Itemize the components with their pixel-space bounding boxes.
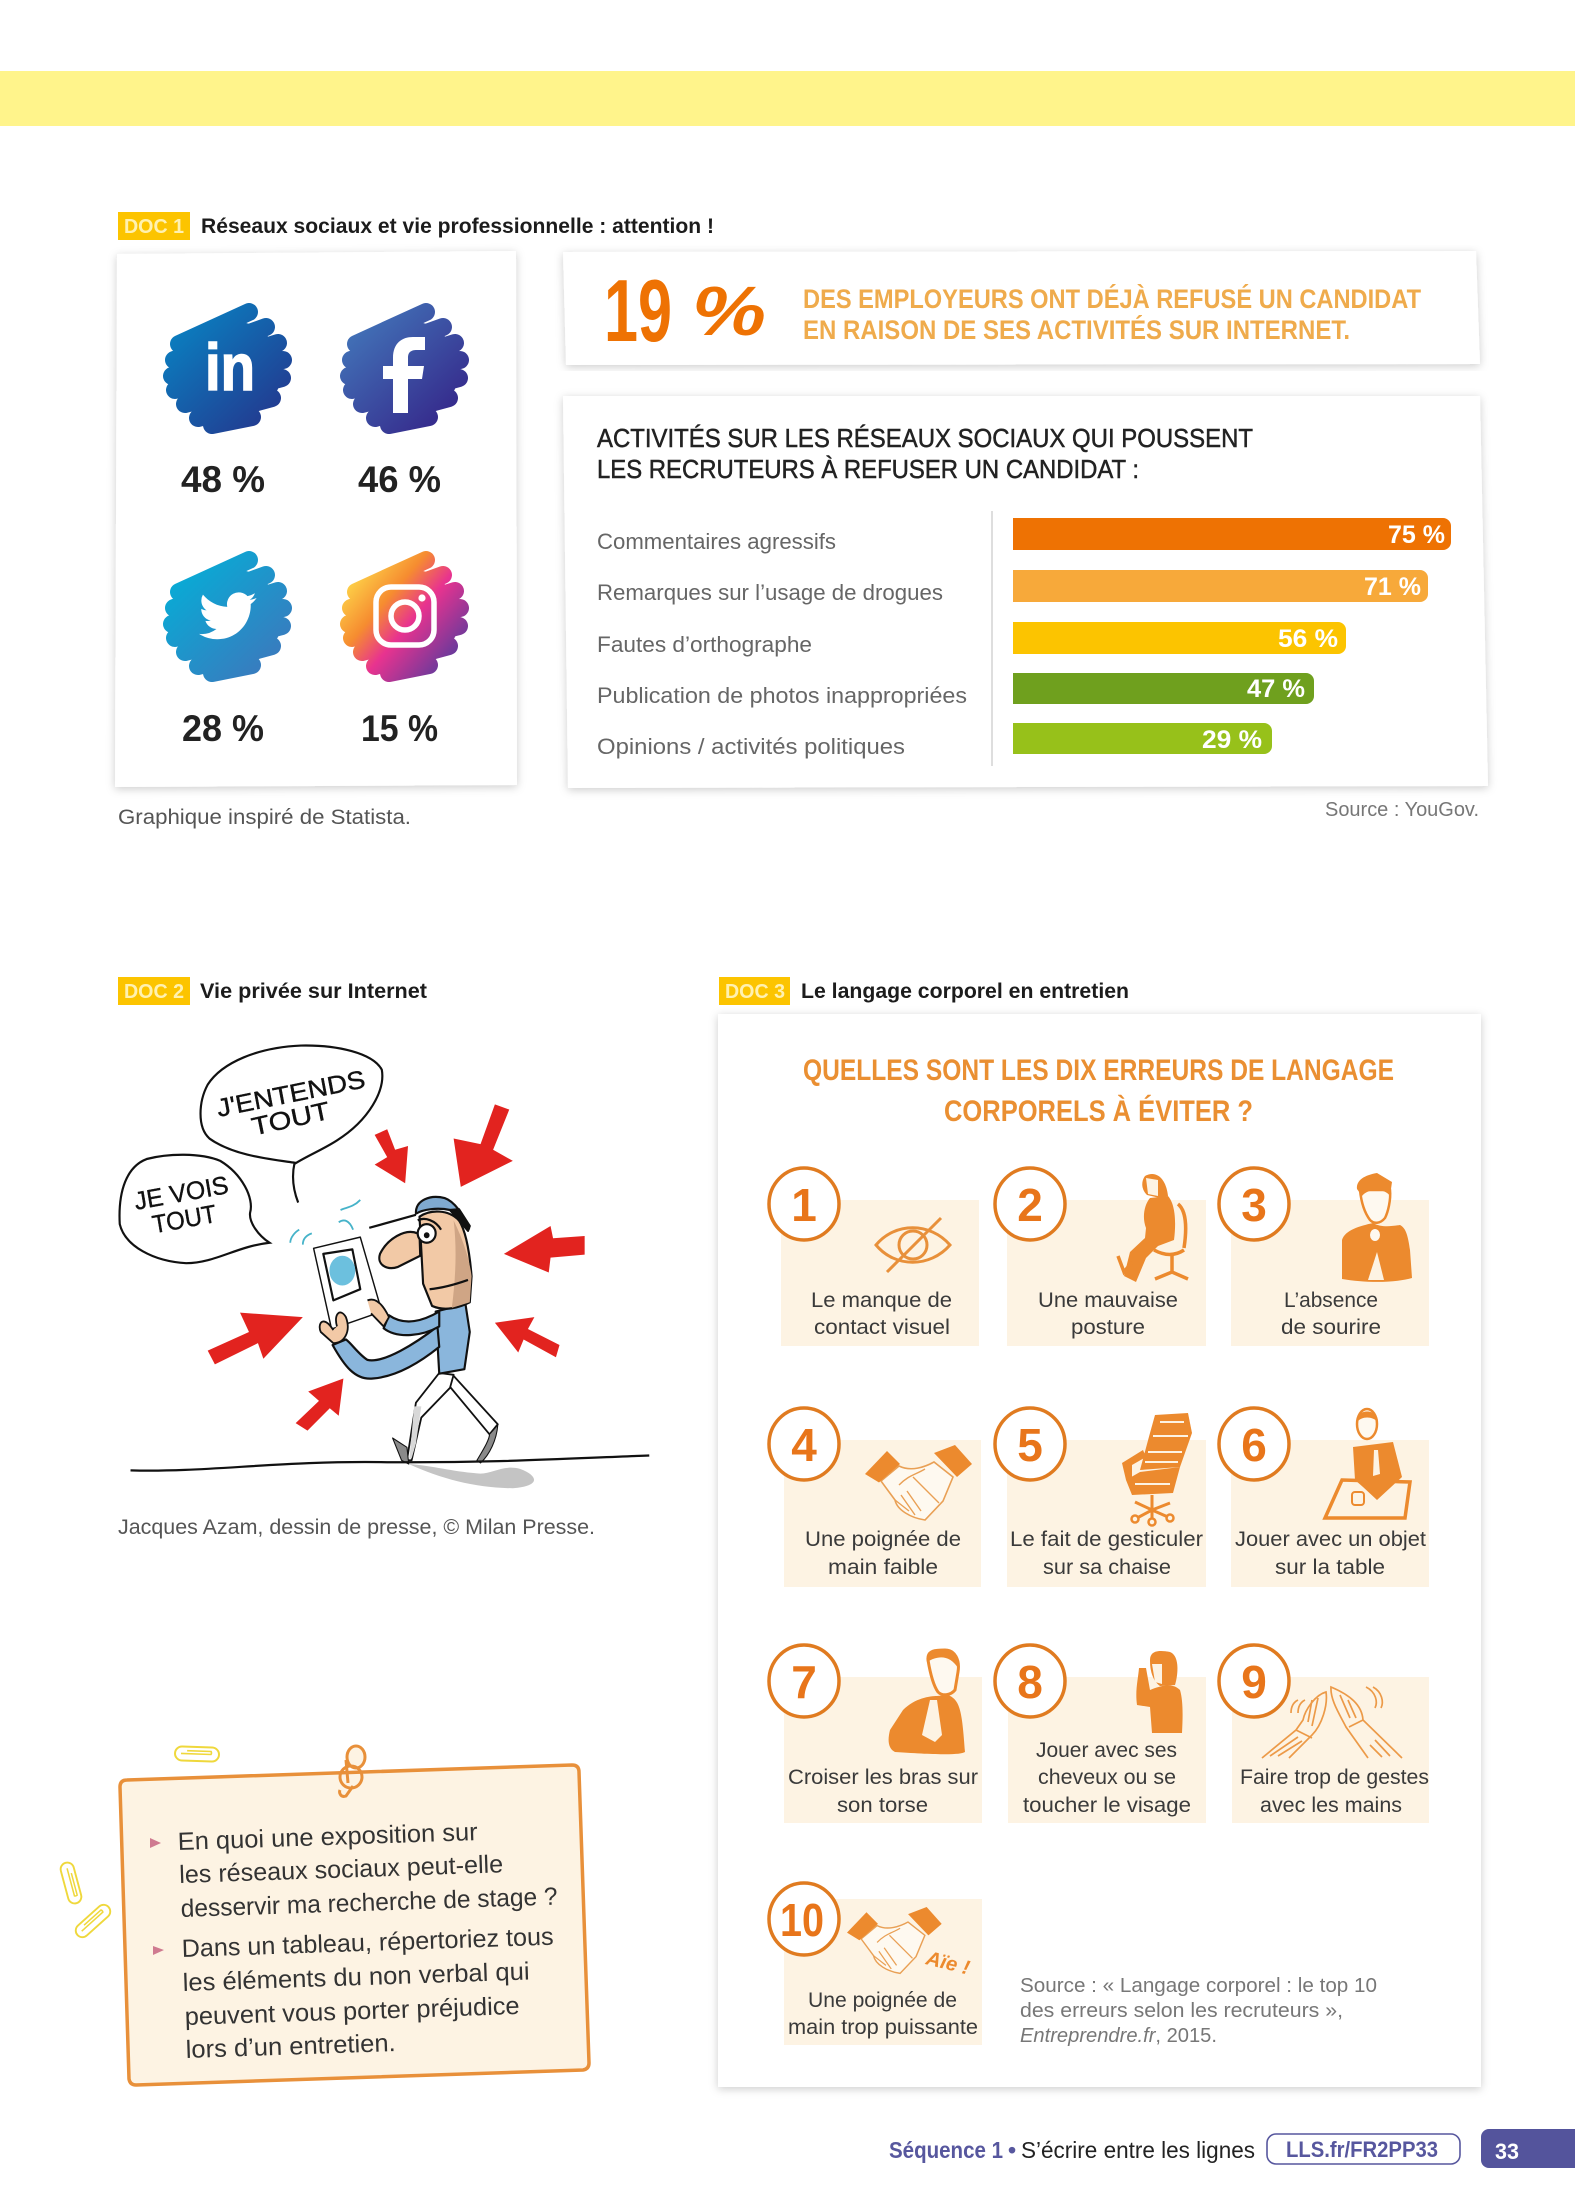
item 8: 8 — [1017, 1656, 1043, 1708]
icon: strong handshake — [847, 1907, 942, 1973]
item 9: avec les mains — [1260, 1793, 1402, 1817]
item 4 — [769, 1408, 981, 1587]
callout text: DES EMPLOYEURS ONT DÉJÀ REFUSÉ UN CANDIDAT — [803, 283, 1421, 314]
item 2: posture — [1071, 1315, 1145, 1339]
speech bubble: je vois tout: TOUT — [150, 1201, 219, 1239]
icon: office chair — [1122, 1413, 1192, 1526]
questions text: desservir ma recherche de stage ? — [180, 1883, 558, 1923]
item 3 — [1219, 1168, 1429, 1346]
item 8 — [995, 1645, 1206, 1823]
item 7: Croiser les bras sur — [788, 1765, 978, 1789]
doc 1 heading: Réseaux sociaux et vie professionnelle : attention ! — [201, 215, 714, 238]
questions text: Dans un tableau, répertoriez tous — [181, 1923, 554, 1963]
source: entreprendre: des erreurs selon les recruteurs », — [1020, 2000, 1343, 2022]
item 6 — [1219, 1408, 1429, 1587]
questions text: les réseaux sociaux peut-elle — [179, 1850, 504, 1889]
chart heading: LES RECRUTEURS À REFUSER UN CANDIDAT : — [597, 454, 1139, 484]
bar labels: Commentaires agressifs — [597, 529, 836, 554]
icon: person at table — [1325, 1409, 1410, 1518]
item 7 — [769, 1645, 982, 1823]
speech bubble: j'entends tout: TOUT — [249, 1098, 332, 1142]
questions text: lors d’un entretien. — [185, 2029, 396, 2064]
panel: social networks — [115, 251, 517, 787]
callout text: EN RAISON DE SES ACTIVITÉS SUR INTERNET. — [803, 314, 1350, 345]
item 2 — [995, 1168, 1206, 1346]
question card — [59, 1746, 589, 2085]
item 9 — [1219, 1645, 1429, 1823]
item 5 — [995, 1408, 1206, 1587]
item 9: 9 — [1241, 1656, 1267, 1708]
panel: bar chart — [563, 396, 1488, 788]
source: yougov: Source : YouGov. — [1325, 799, 1479, 821]
caption: cartoon credit: Jacques Azam, dessin de presse, © Milan Presse. — [118, 1516, 595, 1539]
icon: twitter — [172, 560, 283, 673]
icon: pushpin — [340, 1746, 365, 1796]
item 4: Une poignée de — [805, 1527, 961, 1551]
bar labels: Remarques sur l’usage de drogues — [597, 580, 943, 605]
footer — [889, 2129, 1575, 2168]
doc 3 heading: DOC 3 — [725, 981, 785, 1003]
bar labels: Publication de photos inappropriées — [597, 683, 967, 708]
item 10: Une poignée de — [808, 1988, 957, 2012]
icon: instagram — [349, 560, 460, 673]
paperclip 3 — [73, 1902, 113, 1940]
illustration: cartoon — [120, 1046, 649, 1488]
speech bubble: je vois tout: JE VOIS — [132, 1172, 231, 1216]
big number — [604, 261, 766, 360]
icon: person on chair — [1118, 1174, 1188, 1282]
source: entreprendre: Entreprendre.fr, 2015. — [1020, 2025, 1217, 2047]
big number: % — [692, 272, 766, 350]
source: entreprendre: Source : « Langage corporel : le top 10 — [1020, 1975, 1377, 1997]
speech bubble: j'entends tout: J'ENTENDS — [215, 1066, 368, 1123]
item 6: sur la table — [1275, 1555, 1385, 1579]
bars: 71 % — [1364, 573, 1421, 601]
item 7: son torse — [837, 1793, 928, 1817]
link pill: LLS.fr/FR2PP33 — [1286, 2137, 1438, 2162]
label: linkedin 48 %: 48 % — [181, 459, 265, 500]
panel heading — [803, 1054, 1394, 1128]
icon: linkedin — [172, 312, 283, 425]
paperclip 2 — [59, 1861, 83, 1905]
item 3: L’absence — [1284, 1288, 1378, 1312]
icon: face without smile — [1342, 1173, 1412, 1282]
red arrows — [208, 1104, 585, 1431]
icon: crossed eye — [876, 1218, 950, 1272]
bullet markers — [150, 1838, 164, 1955]
sequence label: Séquence 1 — [889, 2137, 1003, 2163]
questions text: peuvent vous porter préjudice — [184, 1992, 520, 2031]
questions text — [177, 1818, 558, 2064]
item 4: main faible — [828, 1555, 938, 1579]
page number tab — [1481, 2129, 1575, 2168]
character — [290, 1197, 534, 1488]
item 6: Jouer avec un objet — [1235, 1527, 1426, 1551]
paperclip 1 — [175, 1746, 219, 1762]
item 5: sur sa chaise — [1043, 1555, 1171, 1579]
ground line — [131, 1456, 649, 1471]
item 4: 4 — [791, 1419, 817, 1471]
yellow header band — [0, 71, 1575, 126]
item 1: Le manque de — [811, 1288, 952, 1312]
item 10: main trop puissante — [788, 2015, 978, 2039]
caption: statista: Graphique inspiré de Statista. — [118, 806, 411, 829]
icon: touching face — [1136, 1651, 1183, 1733]
item 9: Faire trop de gestes — [1240, 1765, 1429, 1789]
questions text: les éléments du non verbal qui — [182, 1958, 530, 1997]
panel heading: CORPORELS À ÉVITER ? — [944, 1094, 1253, 1128]
item 8: cheveux ou se — [1038, 1765, 1176, 1789]
item 10: 10 — [780, 1894, 824, 1946]
label: instagram 15 %: 15 % — [361, 708, 438, 749]
exclamation: aie: Aïe ! — [923, 1947, 972, 1980]
bar labels: Opinions / activités politiques — [597, 734, 905, 759]
bars: 75 % — [1388, 521, 1445, 549]
speech bubble: je vois tout — [120, 1155, 269, 1263]
icon: facebook — [349, 312, 460, 425]
bars: 56 % — [1278, 625, 1338, 653]
icon: weak handshake — [865, 1445, 972, 1520]
doc 3 heading — [719, 977, 1129, 1005]
item 8: toucher le visage — [1023, 1793, 1191, 1817]
label: twitter 28 %: 28 % — [182, 708, 264, 749]
item 2: 2 — [1017, 1179, 1043, 1231]
item 10 — [769, 1883, 982, 2045]
item 7: 7 — [791, 1656, 817, 1708]
source: entreprendre — [1020, 1975, 1377, 2047]
panel: body language errors — [718, 1014, 1481, 2087]
item 5: 5 — [1017, 1419, 1043, 1471]
label: facebook 46 %: 46 % — [358, 459, 441, 500]
icon: waving hands — [1262, 1687, 1402, 1758]
item 1: 1 — [791, 1179, 817, 1231]
callout text — [803, 283, 1421, 345]
item 8: Jouer avec ses — [1036, 1738, 1177, 1762]
card body — [120, 1765, 589, 2085]
bars: 29 % — [1202, 726, 1262, 754]
item 2: Une mauvaise — [1038, 1288, 1178, 1312]
bars: 47 % — [1247, 675, 1305, 703]
bar labels: Fautes d’orthographe — [597, 632, 812, 657]
item 5: Le fait de gesticuler — [1010, 1527, 1203, 1551]
panel: 19 % callout — [563, 251, 1480, 365]
bars — [1013, 518, 1451, 754]
chart heading: ACTIVITÉS SUR LES RÉSEAUX SOCIAUX QUI POUSSENT — [597, 423, 1253, 453]
doc 1 heading: DOC 1 — [124, 216, 184, 238]
doc 2 heading — [118, 977, 427, 1005]
icon: crossed arms — [889, 1650, 965, 1754]
item 3: 3 — [1241, 1179, 1267, 1231]
speech bubble: j'entends tout — [201, 1046, 382, 1203]
page number tab: 33 — [1495, 2139, 1519, 2164]
item 1: contact visuel — [814, 1315, 950, 1339]
chart heading — [597, 423, 1253, 484]
bar labels — [597, 529, 967, 759]
doc 3 heading: Le langage corporel en entretien — [801, 980, 1129, 1003]
icon: linkedin: in — [205, 330, 255, 404]
footer: • — [1008, 2137, 1016, 2163]
questions text: En quoi une exposition sur — [177, 1818, 478, 1856]
panel heading: QUELLES SONT LES DIX ERREURS DE LANGAGE — [803, 1054, 1394, 1087]
big number: 19 — [604, 261, 672, 360]
doc 2 heading: Vie privée sur Internet — [200, 980, 427, 1003]
footer: S’écrire entre les lignes — [1021, 2137, 1255, 2163]
item 1 — [769, 1168, 979, 1346]
item 3: de sourire — [1281, 1315, 1381, 1339]
item 6: 6 — [1241, 1419, 1267, 1471]
doc 2 heading: DOC 2 — [124, 981, 184, 1003]
